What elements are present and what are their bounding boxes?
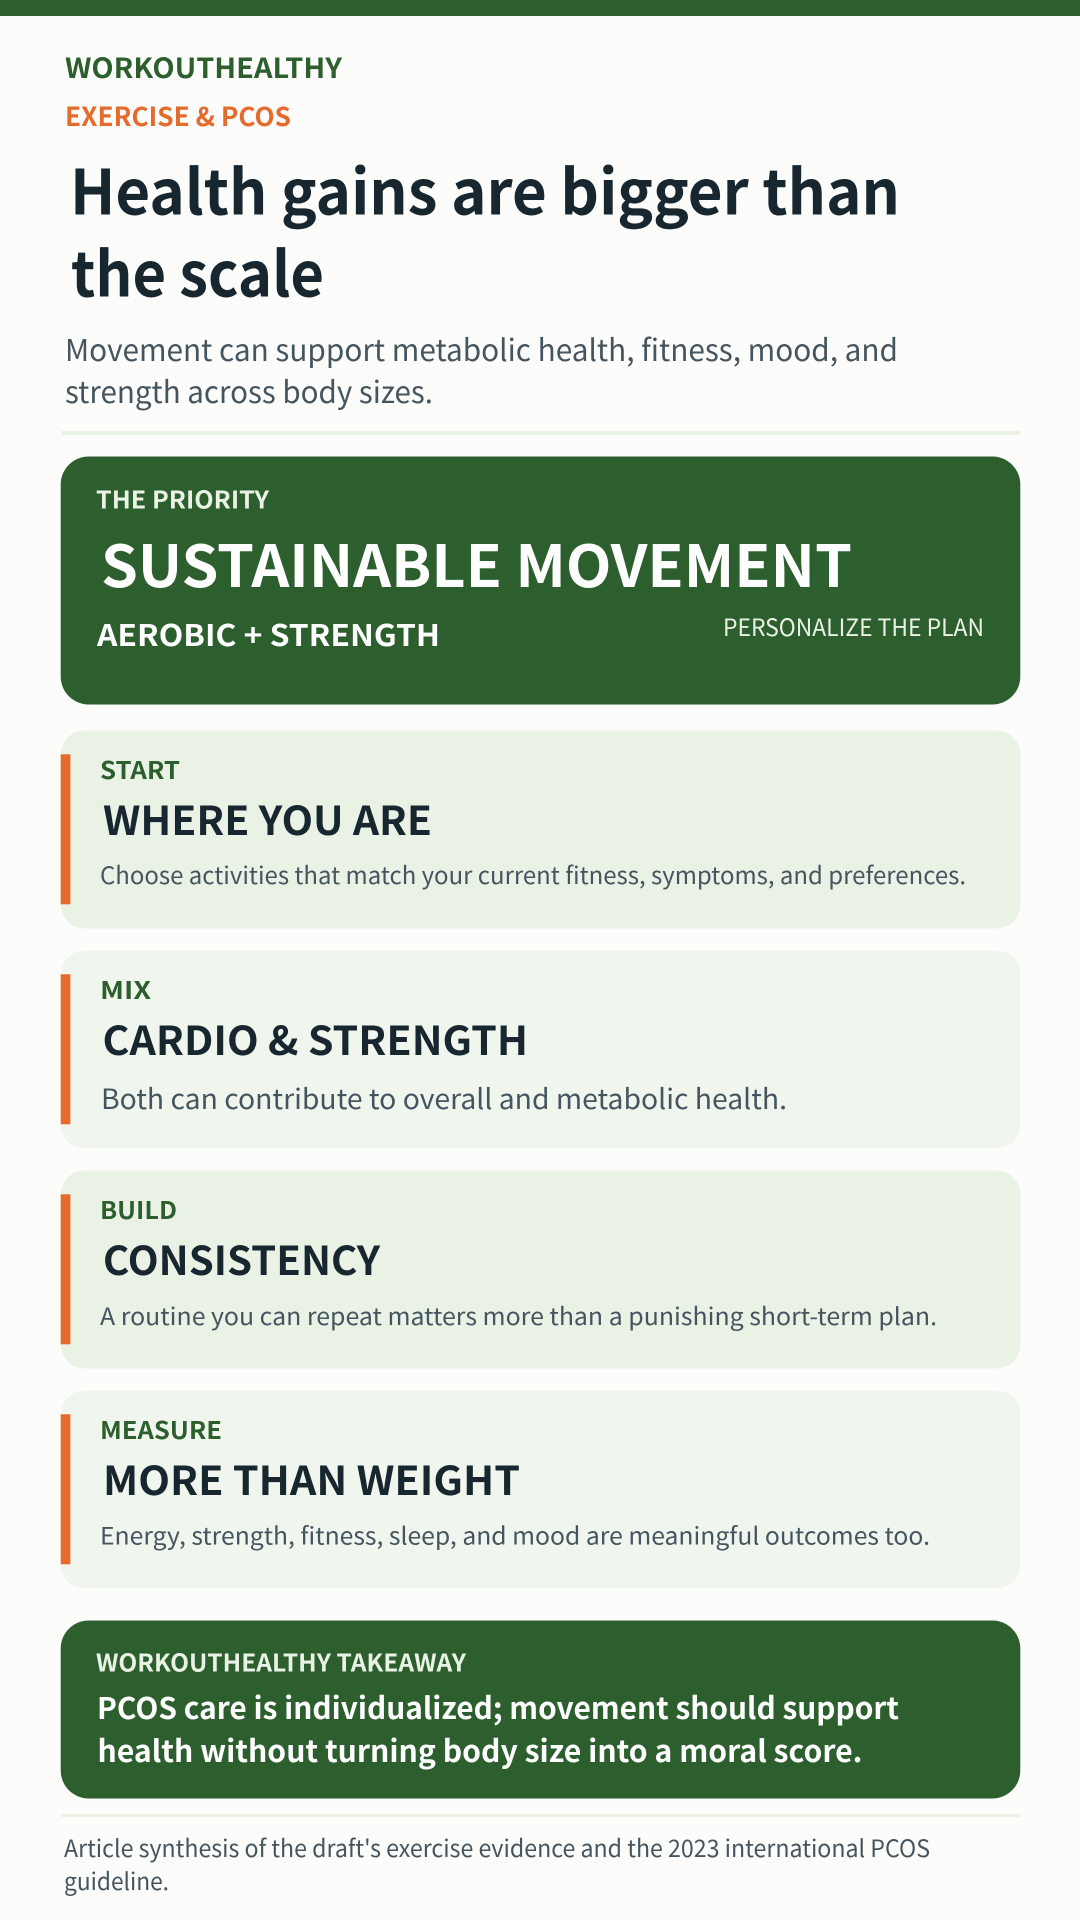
mix heading: CARDIO & STRENGTH — [102, 1009, 528, 1067]
title — [70, 142, 900, 314]
panel: measure — [61, 1390, 1020, 1588]
panel: the priority — [61, 456, 1020, 704]
takeaway text: health without turning body size into a moral score. — [98, 1727, 862, 1771]
panel: start — [61, 730, 1020, 928]
takeaway text — [97, 1684, 899, 1771]
title: Health gains are bigger than — [70, 142, 900, 232]
start description: Choose activities that match your current fitness, symptoms, and preferences. — [100, 856, 966, 891]
priority subline: AEROBIC + STRENGTH — [96, 611, 440, 655]
header — [65, 47, 900, 412]
panel: takeaway — [61, 1620, 1020, 1798]
measure description: Energy, strength, fitness, sleep, and mood are meaningful outcomes too. — [100, 1516, 930, 1552]
accent bar — [61, 1414, 70, 1564]
top bar — [0, 0, 1080, 16]
footer source note — [64, 1829, 930, 1897]
subtitle — [65, 326, 898, 412]
mix description: Both can contribute to overall and metabolic health. — [101, 1078, 787, 1118]
panel: mix — [61, 950, 1020, 1148]
subtitle: Movement can support metabolic health, fitness, mood, and — [65, 326, 898, 370]
build label: BUILD — [100, 1191, 177, 1226]
measure label: MEASURE — [100, 1411, 222, 1446]
build description: A routine you can repeat matters more than a punishing short-term plan. — [100, 1297, 937, 1332]
title: the scale — [71, 224, 324, 314]
start heading: WHERE YOU ARE — [103, 789, 432, 847]
build heading: CONSISTENCY — [103, 1229, 381, 1287]
accent bar — [61, 1194, 70, 1344]
priority label: THE PRIORITY — [96, 480, 270, 516]
topic label: EXERCISE & PCOS — [65, 97, 291, 134]
mix label: MIX — [100, 971, 151, 1006]
start label: START — [100, 751, 180, 786]
measure heading: MORE THAN WEIGHT — [103, 1449, 520, 1507]
footer source note: Article synthesis of the draft's exercise evidence and the 2023 international PCOS — [64, 1829, 930, 1864]
takeaway text: PCOS care is individualized; movement should support — [97, 1684, 899, 1728]
panel: build — [61, 1170, 1020, 1368]
priority headline: SUSTAINABLE MOVEMENT — [101, 520, 852, 604]
takeaway label: WORKOUTHEALTHY TAKEAWAY — [96, 1644, 467, 1678]
accent bar — [61, 754, 70, 904]
brand name: WORKOUTHEALTHY — [65, 47, 343, 87]
subtitle: strength across body sizes. — [65, 368, 433, 412]
personalize note: PERSONALIZE THE PLAN — [723, 608, 984, 643]
footer source note: guideline. — [64, 1862, 169, 1897]
accent bar — [61, 974, 70, 1124]
